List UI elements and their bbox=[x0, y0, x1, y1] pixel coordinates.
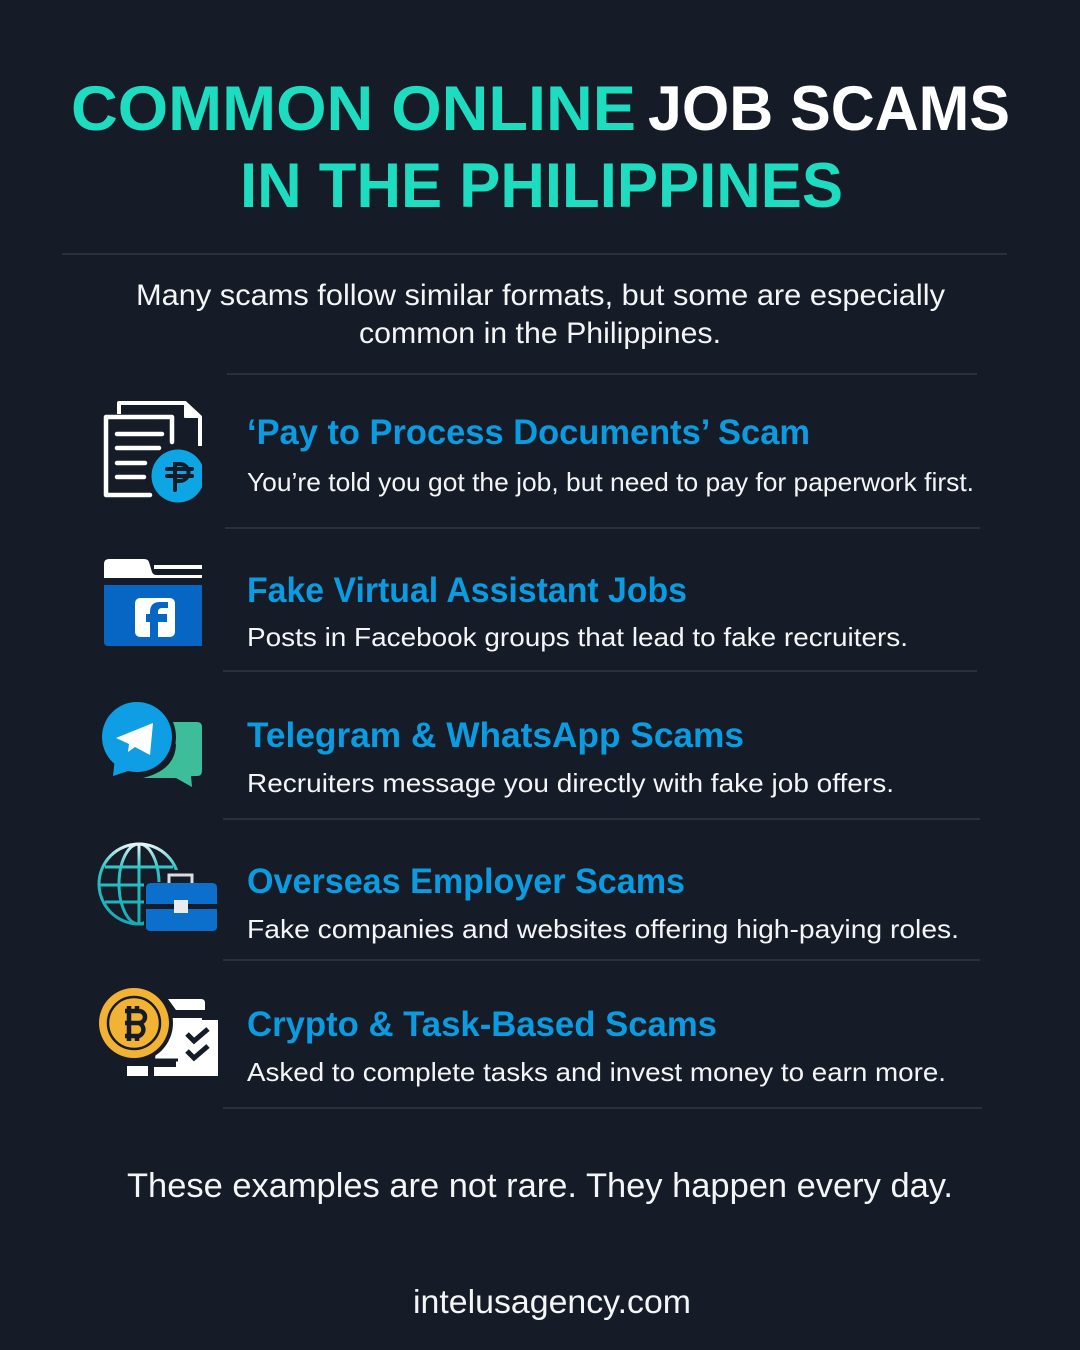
intro text: common in the Philippines. bbox=[359, 317, 721, 350]
scam 4 text: Fake companies and websites offering high-paying roles. bbox=[247, 914, 959, 944]
scam 5 text: Crypto & Task-Based Scams bbox=[247, 1005, 717, 1044]
icon: bitcoin coin and task checklist bbox=[95, 984, 218, 1076]
intro text bbox=[136, 279, 945, 350]
scam 5 text: Asked to complete tasks and invest money to earn more. bbox=[247, 1057, 946, 1087]
scam 4 text bbox=[247, 862, 959, 944]
scam 3 text bbox=[247, 716, 894, 798]
scam 1 text: You’re told you got the job, but need to pay for paperwork first. bbox=[247, 467, 974, 497]
intro text: Many scams follow similar formats, but some are especially bbox=[136, 279, 945, 312]
scam 3 text: Telegram & WhatsApp Scams bbox=[247, 716, 744, 755]
scam 5 text bbox=[247, 1005, 946, 1087]
icon: globe with briefcase bbox=[99, 844, 217, 931]
title: JOB SCAMS bbox=[648, 74, 1010, 144]
scam 1 text: ‘Pay to Process Documents’ Scam bbox=[247, 413, 810, 452]
scam 1 text bbox=[247, 413, 974, 497]
icon: Telegram and WhatsApp chat bubbles bbox=[98, 698, 202, 787]
scam 3 text: Recruiters message you directly with fake job offers. bbox=[247, 768, 894, 798]
scam 2 text: Fake Virtual Assistant Jobs bbox=[247, 571, 687, 610]
scam 4 text: Overseas Employer Scams bbox=[247, 862, 685, 901]
icon: documents with peso coin bbox=[106, 403, 204, 502]
scam 2 text bbox=[247, 571, 908, 652]
title: COMMON ONLINE bbox=[71, 74, 636, 144]
title bbox=[71, 74, 1010, 221]
website: intelusagency.com bbox=[413, 1283, 691, 1320]
icon: folder with Facebook logo bbox=[104, 559, 202, 646]
scam 2 text: Posts in Facebook groups that lead to fake recruiters. bbox=[247, 622, 908, 652]
title: IN THE PHILIPPINES bbox=[240, 151, 843, 221]
closing statement: These examples are not rare. They happen every day. bbox=[127, 1167, 953, 1205]
